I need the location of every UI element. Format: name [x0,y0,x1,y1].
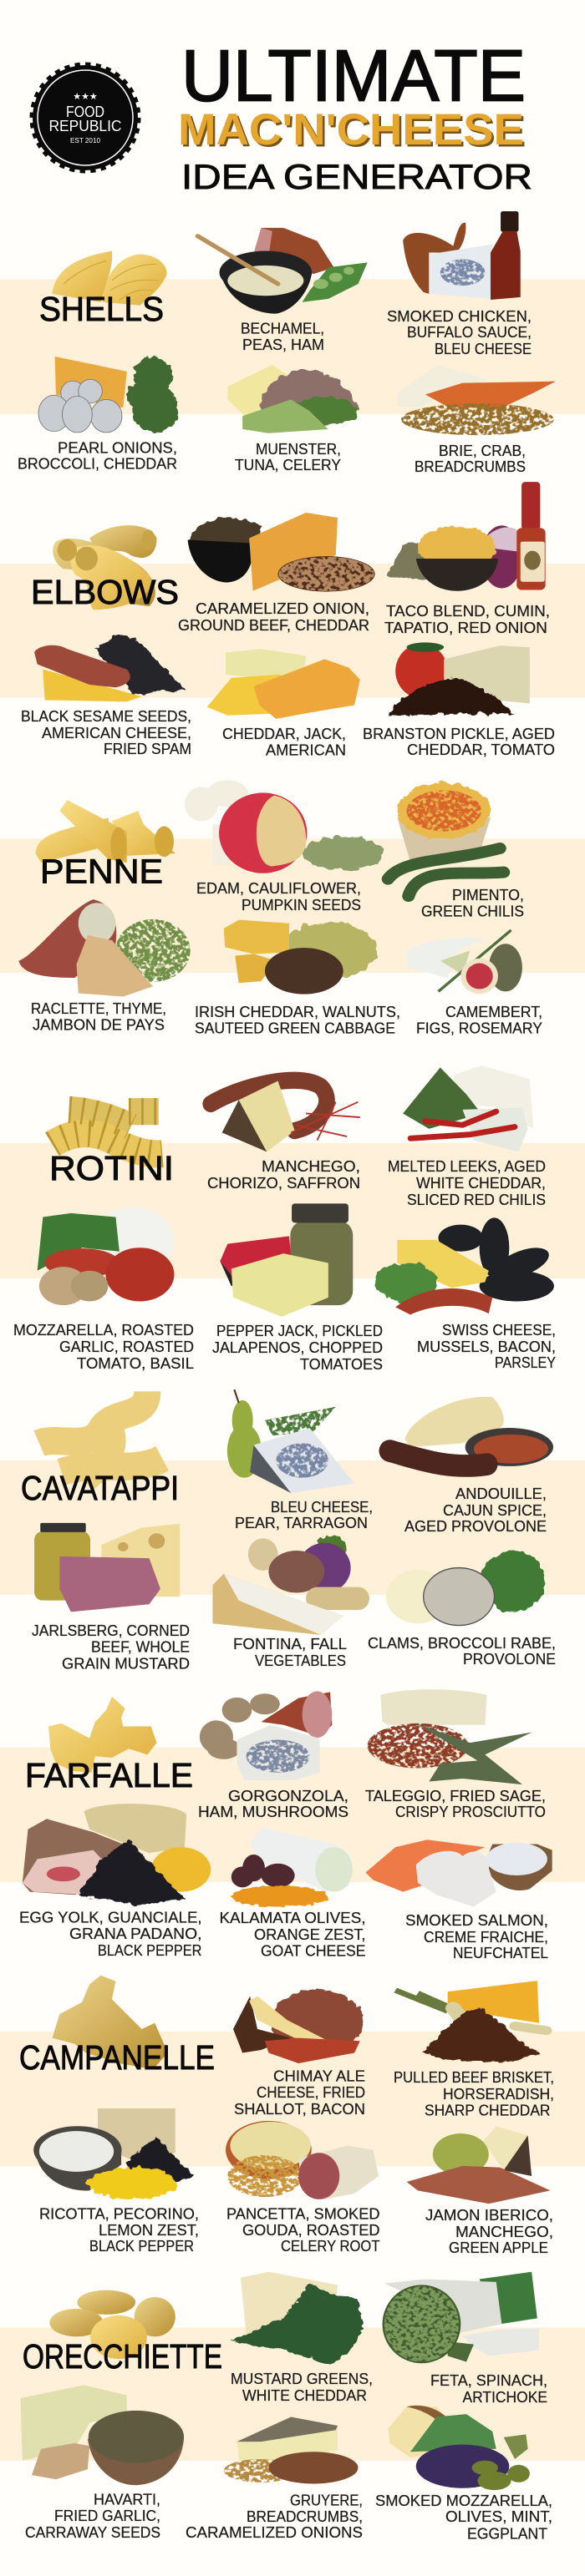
heading: penne: PENNE [40,852,163,890]
caption: egg yolk: EGG YOLK, GUANCIALE, [19,1909,201,1926]
caption: havarti: CARRAWAY SEEDS [25,2524,160,2541]
caption: pimento: PIMENTO, [452,887,524,903]
caption: caramelized onion: GROUND BEEF, CHEDDAR [178,617,369,634]
icon: camembert, figs, rosemary [407,930,522,994]
pasta icon: rotini [52,1110,162,1154]
caption: mustard greens: MUSTARD GREENS, [231,2371,373,2387]
caption: chimay: CHEESE, FRIED [257,2084,365,2101]
caption: feta [430,2372,547,2406]
band [0,279,585,414]
pasta icon: orecchiette [49,2290,176,2359]
badge: Food Republic logo: FOOD [66,104,104,120]
caption: swiss cheese [417,1322,556,1371]
icon: edam, cauliflower, pumpkin seeds [185,780,384,873]
caption: clams: PROVOLONE [463,1651,556,1668]
title: IDEA GENERATOR [181,157,532,196]
icon: havarti, fried garlic, carraway seeds [21,2385,184,2485]
panel: penne [0,780,585,1037]
icon: fontina, fall vegetables [212,1536,359,1635]
caption: havarti [25,2492,160,2541]
caption: irish cheddar: IRISH CHEDDAR, WALNUTS, [195,1004,400,1020]
icon: manchego, chorizo, saffron [211,1081,360,1151]
caption: andouille [404,1485,547,1535]
band [0,564,585,698]
caption: muenster: MUENSTER, [256,441,341,458]
caption: pearl onions: PEARL ONIONS, [58,439,177,456]
caption: pepper jack: TOMATOES [300,1356,383,1373]
caption: camembert: CAMEMBERT, [445,1004,542,1020]
caption: andouille: CAJUN SPICE, [443,1502,547,1519]
title: ULTIMATE [181,35,526,117]
caption: pepper jack: PEPPER JACK, PICKLED [216,1323,383,1339]
title: MAC'N'CHEESE [178,105,524,154]
caption: pepper jack [212,1323,383,1373]
caption: pancetta: GOUDA, ROASTED [242,2222,379,2239]
caption: pancetta [226,2206,380,2255]
caption: brie: BREADCRUMBS [415,458,526,475]
icon: chimay ale cheese, fried shallot, bacon [233,1991,364,2063]
caption: raclette: JAMBON DE PAYS [33,1017,165,1034]
panel: farfalle [0,1689,585,1961]
caption: black sesame: BLACK SESAME SEEDS, [21,708,191,725]
badge: Food Republic logo: EST 2010 [70,137,101,144]
caption: smoked mozzarella: OLIVES, MINT, [445,2508,552,2525]
caption: bechamel: BECHAMEL, [241,320,324,337]
caption: branston: BRANSTON PICKLE, AGED [363,726,555,742]
panel: campanelle [0,1976,585,2256]
caption: andouille: AGED PROVOLONE [404,1518,547,1535]
caption: cheddar, jack: AMERICAN [266,741,346,758]
caption: smoked salmon: NEUFCHATEL [453,1945,548,1961]
icon: bleu cheese, pear, tarragon [227,1389,354,1493]
caption: fontina [233,1636,347,1669]
caption: manchego: MANCHEGO, [262,1158,360,1175]
caption: edam: EDAM, CAULIFLOWER, [196,880,361,897]
heading: elbows: ELBOWS [31,573,179,611]
caption: jamon: MANCHEGO, [455,2224,553,2240]
icon: mustard greens, white cheddar [231,2272,364,2365]
icon: ricotta, pecorino, lemon zest, black pepper [33,2108,194,2199]
icon: kalamata olives, orange zest, goat cheese [231,1828,353,1907]
pasta icon: shells [52,251,167,306]
caption: smoked salmon: CREME FRAICHE, [424,1929,548,1946]
caption: chimay: SHALLOT, BACON [234,2101,365,2118]
caption: irish cheddar [195,1004,400,1037]
caption: taleggio: TALEGGIO, FRIED SAGE, [365,1788,546,1804]
caption: gorgonzola [198,1788,348,1820]
caption: pearl onions [18,439,177,473]
caption: pimento: GREEN CHILIS [421,903,524,920]
caption: pearl onions: BROCCOLI, CHEDDAR [18,456,177,473]
band [0,838,585,973]
pasta icon: penne [35,800,176,863]
icon: irish cheddar, walnuts, cabbage [224,920,377,994]
caption: brie: BRIE, CRAB, [439,443,526,459]
icon: feta, spinach, artichoke [383,2272,539,2363]
caption: bechamel: PEAS, HAM [242,337,324,353]
icon: smoked mozzarella, olives, mint, eggplant [388,2406,530,2490]
heading: rotini: ROTINI [49,1149,174,1187]
caption: pulled beef [394,2069,554,2119]
caption: pulled beef: HORSERADISH, [443,2086,554,2103]
caption: jarlsberg: JARLSBERG, CORNED [32,1622,190,1639]
icon: smoked chicken, buffalo sauce, bleu cheese [403,211,521,300]
icon: caramelized onion, ground beef, cheddar [188,513,375,592]
caption: black sesame: AMERICAN CHEESE, [42,725,191,741]
caption: swiss cheese: PARSLEY [495,1354,556,1371]
caption: taleggio [365,1788,546,1820]
caption: taco blend [384,603,550,636]
caption: muenster: TUNA, CELERY [235,457,341,473]
icon: brie, crab, breadcrumbs [397,365,556,435]
caption: pancetta: PANCETTA, SMOKED [226,2206,379,2223]
caption: egg yolk: BLACK PEPPER [98,1942,202,1959]
caption: jamon: GREEN APPLE [449,2239,548,2256]
icon: melted leeks, aged white cheddar, red chilis [403,1065,533,1151]
caption: camembert: FIGS, ROSEMARY [416,1020,542,1037]
icon: pimento, green chilis [388,783,504,896]
icon: black sesame seeds, american cheese, fried spam [34,635,185,701]
panel: cavatappi [0,1389,585,1672]
icon: smoked salmon, creme fraiche, neufchatel [365,1840,552,1907]
icon: branston pickle, aged cheddar, tomato [388,642,530,716]
caption: swiss cheese: SWISS CHEESE, [442,1322,556,1339]
caption: gruyere: CARAMELIZED ONIONS [186,2524,363,2541]
caption: jamon: JAMON IBERICO, [425,2207,553,2224]
caption: pulled beef: SHARP CHEDDAR [425,2103,550,2119]
caption: bechamel [241,320,324,353]
icon: jarlsberg, corned beef, whole grain mustard [34,1523,180,1612]
caption: smoked mozzarella: SMOKED MOZZARELLA, [375,2492,552,2509]
caption: cheddar, jack [222,726,346,758]
band [0,2032,585,2166]
caption: kalamata [219,1910,366,1959]
caption: jarlsberg: GRAIN MUSTARD [62,1655,190,1672]
caption: taco blend: TACO BLEND, CUMIN, [386,603,550,620]
heading: campanelle: CAMPANELLE [19,2038,215,2077]
caption: edam: PUMPKIN SEEDS [242,897,361,913]
caption: jarlsberg [32,1622,190,1672]
panel: shells [0,211,585,475]
caption: feta: ARTICHOKE [463,2389,547,2406]
caption: kalamata: GOAT CHEESE [261,1942,366,1959]
icon: taleggio, fried sage, crispy prosciutto [368,1689,532,1784]
caption: brie [415,443,526,475]
caption: gorgonzola: HAM, MUSHROOMS [198,1804,348,1820]
caption: gruyere [186,2492,363,2541]
caption: black sesame: FRIED SPAM [104,741,191,757]
heading: cavatappi: CAVATAPPI [21,1469,179,1507]
caption: pepper jack: JALAPENOS, CHOPPED [212,1339,383,1356]
caption: bleu cheese: PEAR, TARRAGON [235,1515,368,1531]
caption: muenster [235,441,341,473]
caption: raclette [31,1000,166,1034]
icon: pearl onions, broccoli, cheddar [38,357,178,433]
badge: Food Republic logo [33,65,138,170]
panel: rotini [0,1065,585,1373]
pasta icon: cavatappi [39,1391,162,1480]
caption: pimento [421,887,524,920]
caption: egg yolk: GRANA PADANO, [69,1926,202,1942]
caption: smoked chicken [387,308,532,357]
caption: mozzarella: GARLIC, ROASTED [59,1339,194,1355]
caption: kalamata: KALAMATA OLIVES, [219,1910,366,1926]
caption: feta: FETA, SPINACH, [430,2372,547,2389]
caption: mozzarella [13,1322,194,1372]
band [0,1460,585,1595]
band [0,2328,585,2461]
caption: irish cheddar: SAUTEED GREEN CABBAGE [195,1020,395,1037]
caption: ricotta [39,2206,199,2255]
caption: taco blend: TAPATIO, RED ONION [384,620,547,636]
caption: ricotta: BLACK PEPPER [89,2238,194,2255]
caption: pulled beef: PULLED BEEF BRISKET, [394,2069,554,2086]
caption: mozzarella: TOMATO, BASIL [77,1355,194,1372]
caption: melted leeks: WHITE CHEDDAR, [416,1175,546,1192]
band [0,1747,585,1882]
icon: cheddar, jack, american [207,649,360,719]
caption: manchego: CHORIZO, SAFFRON [207,1175,360,1192]
caption: smoked mozzarella [375,2492,552,2542]
caption: gruyere: BREADCRUMBS, [247,2508,363,2525]
caption: havarti: FRIED GARLIC, [54,2508,160,2524]
caption: branston: CHEDDAR, TOMATO [407,741,555,758]
caption: taleggio: CRISPY PROSCIUTTO [395,1804,546,1820]
caption: chimay [234,2067,365,2118]
icon: gruyere, breadcrumbs, caramelized onions [224,2417,359,2483]
caption: chimay: CHIMAY ALE [273,2067,365,2084]
icon: bechamel, peas, ham [198,228,368,314]
caption: edam [196,880,361,913]
pasta icon: campanelle [52,1976,168,2069]
caption: caramelized onion [178,600,369,634]
caption: gruyere: GRUYERE, [290,2492,363,2508]
icon: mozzarella, roasted garlic, tomato, basil [38,1207,174,1305]
caption: egg yolk [19,1909,202,1959]
caption: melted leeks: SLICED RED CHILIS [407,1192,546,1208]
pasta icon: farfalle [48,1697,156,1773]
pasta icon: elbows [53,525,156,610]
icon: jamon iberico, manchego, green apple [407,2126,550,2204]
badge: Food Republic logo: REPUBLIC [48,118,122,134]
caption: smoked mozzarella: EGGPLANT [467,2525,547,2542]
caption: smoked salmon: SMOKED SALMON, [405,1912,548,1929]
caption: manchego [207,1158,360,1192]
caption: smoked chicken: BUFFALO SAUCE, [407,324,532,341]
caption: caramelized onion: CARAMELIZED ONION, [196,600,369,617]
caption: clams [368,1635,556,1668]
icon: pepper jack, pickled jalapenos, tomatoes [220,1203,353,1317]
caption: clams: CLAMS, BROCCOLI RABE, [368,1635,556,1652]
icon: egg yolk, guanciale, grana padano, black pepper [23,1804,211,1905]
panel: elbows [0,482,585,758]
icon: taco blend, cumin, tapatio, red onion [386,482,546,591]
caption: fontina: VEGETABLES [255,1652,346,1669]
caption: black sesame [21,708,191,757]
icon: clams, broccoli rabe, provolone [386,1551,545,1626]
caption: mustard greens [231,2371,373,2404]
heading: orecchiette: ORECCHIETTE [23,2337,222,2376]
title [178,35,532,196]
caption: swiss cheese: MUSSELS, BACON, [417,1339,556,1355]
caption: smoked chicken: BLEU CHEESE [435,341,532,357]
caption: smoked chicken: SMOKED CHICKEN, [387,308,532,325]
heading: farfalle: FARFALLE [25,1756,193,1794]
icon: gorgonzola, ham, mushrooms [200,1691,332,1780]
caption: bleu cheese [235,1499,373,1531]
caption: cheddar, jack: CHEDDAR, JACK, [222,726,346,742]
caption: jamon [425,2207,553,2256]
band [0,1143,585,1278]
caption: bleu cheese: BLEU CHEESE, [271,1499,373,1516]
caption: branston [363,726,555,758]
icon: andouille, cajun spice, aged provolone [389,1397,553,1466]
caption: andouille: ANDOUILLE, [455,1485,547,1502]
caption: smoked salmon [405,1912,548,1961]
badge: Food Republic logo: ★★★ [73,92,98,102]
icon: raclette, thyme, jambon de pays [18,899,191,997]
heading: shells: SHELLS [39,290,164,328]
icon: muenster, tuna, celery [227,365,360,433]
panel: orecchiette [0,2272,585,2542]
caption: raclette: RACLETTE, THYME, [31,1000,166,1017]
caption: jarlsberg: BEEF, WHOLE [91,1638,190,1655]
caption: ricotta: RICOTTA, PECORINO, [39,2206,199,2223]
icon: pancetta, smoked gouda, roasted celery root [226,2121,379,2199]
caption: kalamata: ORANGE ZEST, [254,1926,366,1943]
caption: gorgonzola: GORGONZOLA, [228,1788,348,1804]
icon: pulled beef brisket, horseradish, sharp cheddar [395,1981,547,2062]
caption: mozzarella: MOZZARELLA, ROASTED [13,1322,194,1339]
caption: melted leeks [388,1158,546,1208]
caption: fontina: FONTINA, FALL [233,1636,347,1652]
caption: havarti: HAVARTI, [94,2492,160,2508]
caption: ricotta: LEMON ZEST, [99,2222,199,2239]
caption: pancetta: CELERY ROOT [281,2238,380,2255]
caption: camembert [416,1004,542,1037]
caption: mustard greens: WHITE CHEDDAR [242,2387,367,2404]
caption: melted leeks: MELTED LEEKS, AGED [388,1158,546,1175]
icon: swiss cheese, mussels, bacon, parsley [375,1217,554,1315]
